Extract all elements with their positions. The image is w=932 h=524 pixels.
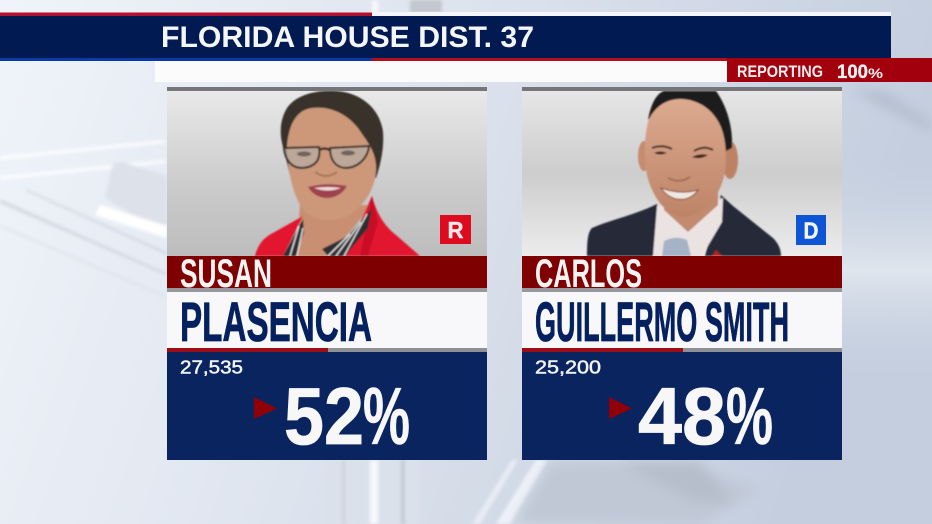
tie xyxy=(662,238,691,256)
neck and shirt xyxy=(653,198,723,256)
nose shadow xyxy=(315,172,337,176)
chest xyxy=(300,225,345,256)
mouth xyxy=(308,184,347,198)
face xyxy=(645,99,726,217)
neck xyxy=(296,205,372,256)
party badge: Democrat: D xyxy=(804,218,818,244)
party badge: Republican: R xyxy=(448,217,464,243)
percentage: 48 xyxy=(638,372,726,462)
vote count: 25,200 xyxy=(535,356,601,378)
blazer xyxy=(255,196,420,256)
title: FLORIDA HOUSE DIST. 37 xyxy=(161,21,534,54)
panel: Carlos Guillermo Smith xyxy=(522,87,842,462)
vote share stripe xyxy=(522,348,842,352)
vote share stripe xyxy=(167,348,487,352)
hair xyxy=(281,91,383,178)
lead arrow xyxy=(254,397,277,419)
lead arrow xyxy=(609,397,632,419)
blouse xyxy=(283,208,372,256)
party badge: Republican xyxy=(440,215,471,244)
vote count: 27,535 xyxy=(180,356,243,378)
candidate photo: Carlos Guillermo Smith xyxy=(522,91,842,256)
percentage: % xyxy=(363,372,410,462)
reporting percent: 100 xyxy=(837,61,868,83)
panel: Susan Plasencia xyxy=(167,87,487,462)
results box xyxy=(522,352,842,462)
percentage xyxy=(638,372,773,462)
last name band: PLASENCIA xyxy=(180,290,372,353)
results box xyxy=(167,352,487,462)
jacket xyxy=(587,195,781,256)
reporting bar: % xyxy=(868,65,884,81)
lapel pin xyxy=(712,250,722,256)
reporting bar xyxy=(155,58,932,83)
reporting label: REPORTING xyxy=(737,63,823,81)
face xyxy=(287,108,376,220)
first name band xyxy=(167,252,487,296)
eyes xyxy=(297,152,311,156)
title banner xyxy=(0,12,891,61)
mouth xyxy=(661,188,698,199)
ears xyxy=(637,140,647,172)
first name band: SUSAN xyxy=(180,252,272,296)
nose shadow xyxy=(668,177,690,181)
percentage: 52 xyxy=(284,372,364,462)
party badge: Democrat xyxy=(796,215,826,245)
first name band: CARLOS xyxy=(535,252,642,296)
candidate photo: Susan Plasencia xyxy=(167,91,487,256)
percentage: % xyxy=(726,372,773,462)
glasses xyxy=(284,146,369,168)
first name band xyxy=(522,252,842,296)
hair xyxy=(648,91,732,152)
eyes xyxy=(652,146,713,151)
